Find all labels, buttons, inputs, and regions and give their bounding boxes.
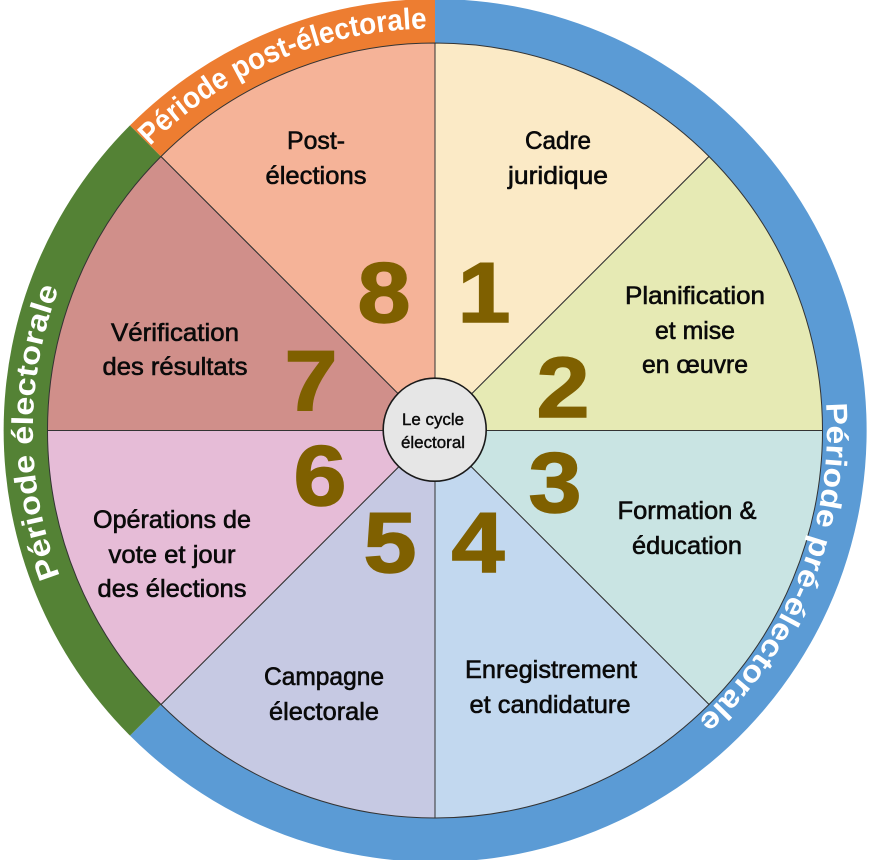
segment 7: vérification (48, 156, 435, 430)
label: formation et éducation: Formation & (618, 497, 757, 525)
number 2: 2 (536, 341, 590, 436)
label: vérification des résultats: Vérification (111, 319, 239, 347)
label: planification et mise en œuvre: Planification (625, 282, 765, 310)
segment 2: planification (435, 156, 822, 430)
label: cadre juridique: juridique (507, 162, 608, 190)
label: campagne électorale: électorale (269, 698, 379, 726)
label: opérations de vote et jour des élections: Opérations de (93, 506, 251, 534)
label: campagne électorale: Campagne (264, 663, 384, 691)
number 8: 8 (358, 246, 410, 341)
label: post-élections: élections (266, 162, 366, 190)
hub text: Le cycle (402, 410, 464, 429)
band label: période post-électorale: Période post-électorale (137, 8, 426, 145)
number 4: 4 (452, 496, 504, 591)
band label: période électorale: Période électorale (10, 286, 60, 581)
label: planification et mise en œuvre: et mise (655, 317, 735, 345)
segment 6: opérations de vote (48, 430, 435, 704)
segment 1: cadre juridique (435, 43, 709, 430)
band label: période pré-électorale: Période pré-électorale (702, 404, 849, 728)
segment 3: formation (435, 430, 822, 704)
label: post-élections: Post- (287, 127, 345, 155)
hub text: électoral (401, 433, 465, 452)
label: enregistrement et candidature: Enregistrement (465, 656, 637, 684)
number 1: 1 (458, 246, 510, 341)
segment 4: enregistrement (435, 430, 709, 818)
label: cadre juridique: Cadre (525, 127, 591, 155)
number 5: 5 (364, 496, 416, 591)
segment 8: post-élections (161, 43, 435, 430)
number 6: 6 (294, 429, 346, 524)
label: planification et mise en œuvre: en œuvre (642, 351, 748, 379)
label: opérations de vote et jour des élections: vote et jour (108, 541, 236, 569)
number 7: 7 (284, 334, 338, 429)
label: vérification des résultats: des résultats (102, 353, 248, 381)
number 3: 3 (528, 436, 582, 531)
label: opérations de vote et jour des élections: des élections (98, 575, 246, 603)
label: enregistrement et candidature: et candidature (470, 691, 630, 719)
ring: électorale period (4, 125, 435, 736)
ring: post-électorale period (130, 0, 435, 430)
label: formation et éducation: éducation (632, 532, 742, 560)
centre hub (383, 378, 486, 481)
segment 5: campagne (161, 430, 435, 818)
